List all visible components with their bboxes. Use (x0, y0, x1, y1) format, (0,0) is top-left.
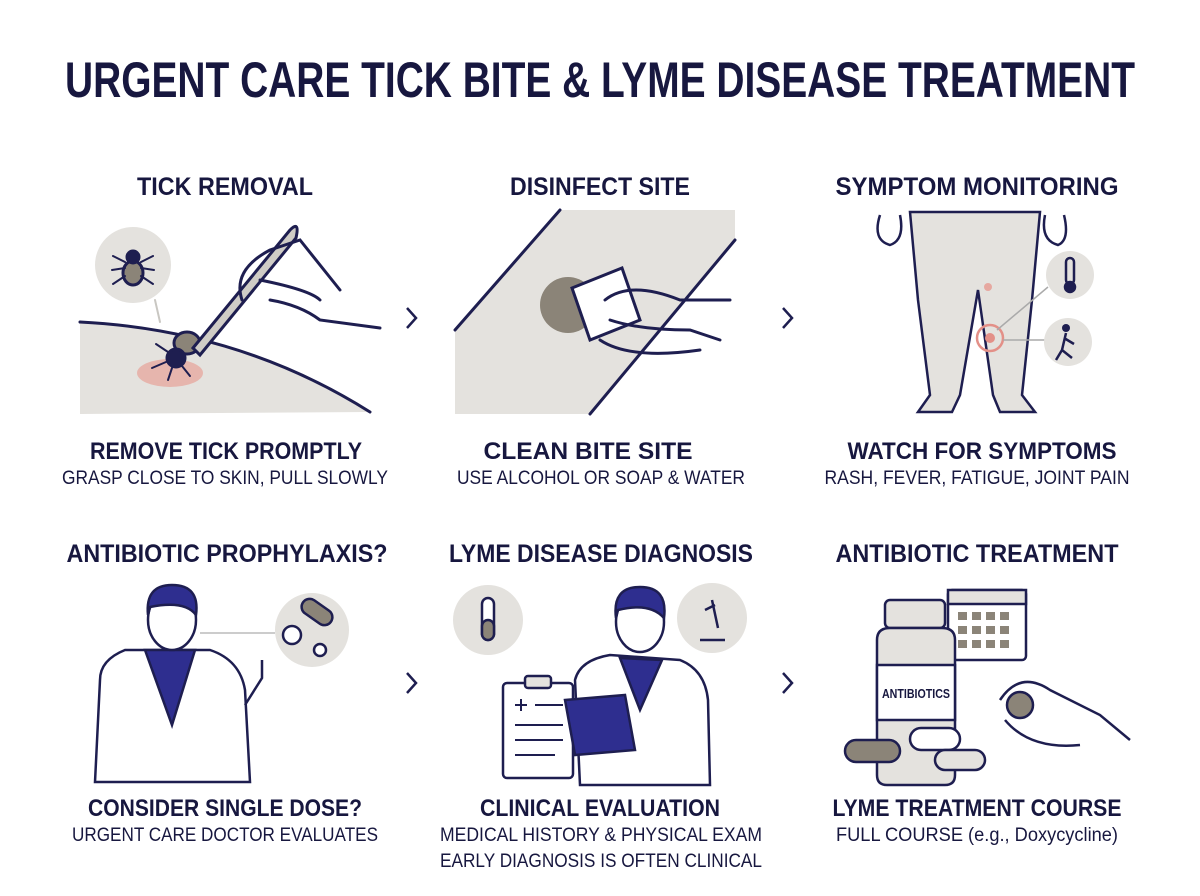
subcaption: RASH, FEVER, FATIGUE, JOINT PAIN (824, 468, 1130, 489)
heading: disinfect site: DISINFECT SITE (510, 173, 690, 201)
panel: antibiotic prophylaxis (66, 540, 388, 846)
subcaption line 2: EARLY DIAGNOSIS IS OFTEN CLINICAL (440, 851, 762, 872)
caption: CLINICAL EVALUATION (480, 795, 720, 822)
illustration: pill bottle, calendar, hand: ANTIBIOTICS (882, 686, 950, 701)
heading: ANTIBIOTIC TREATMENT (836, 540, 1118, 568)
illustration: doctor with clipboard (453, 583, 747, 785)
heading: ANTIBIOTIC PROPHYLAXIS? (66, 540, 388, 568)
caption: clean bite site: CLEAN BITE SITE (484, 438, 692, 465)
panel: tick removal (62, 173, 388, 489)
heading: tick removal: TICK REMOVAL (137, 173, 313, 201)
caption: LYME TREATMENT COURSE (832, 795, 1122, 822)
panel: disinfect site (455, 173, 745, 489)
subcaption: URGENT CARE DOCTOR EVALUATES (72, 825, 378, 846)
panel: diagnosis (440, 540, 762, 872)
illustration: pill bottle, calendar, hand (845, 590, 1130, 785)
panel: symptom monitoring (824, 173, 1130, 489)
illustration: tick removal (80, 226, 380, 414)
subcaption line 1: MEDICAL HISTORY & PHYSICAL EXAM (440, 825, 762, 846)
caption: watch for symptoms: WATCH FOR SYMPTOMS (848, 438, 1116, 465)
arrow 2 (783, 308, 792, 328)
arrow 3 (407, 673, 416, 693)
caption: CONSIDER SINGLE DOSE? (88, 795, 362, 822)
illustration: doctor with pills (95, 585, 349, 782)
subcaption: USE ALCOHOL OR SOAP & WATER (457, 468, 745, 489)
arrow 1 (407, 308, 416, 328)
illustration: cleaning (455, 210, 735, 414)
arrow 4 (783, 673, 792, 693)
subcaption: FULL COURSE (e.g., Doxycycline) (836, 825, 1118, 846)
caption: remove tick promptly: REMOVE TICK PROMPTLY (90, 438, 362, 465)
illustration: body (878, 212, 1094, 412)
heading: LYME DISEASE DIAGNOSIS (449, 540, 753, 568)
subcaption: GRASP CLOSE TO SKIN, PULL SLOWLY (62, 468, 388, 489)
panel: antibiotic treatment (832, 540, 1130, 846)
heading: symptom monitoring: SYMPTOM MONITORING (836, 173, 1118, 201)
